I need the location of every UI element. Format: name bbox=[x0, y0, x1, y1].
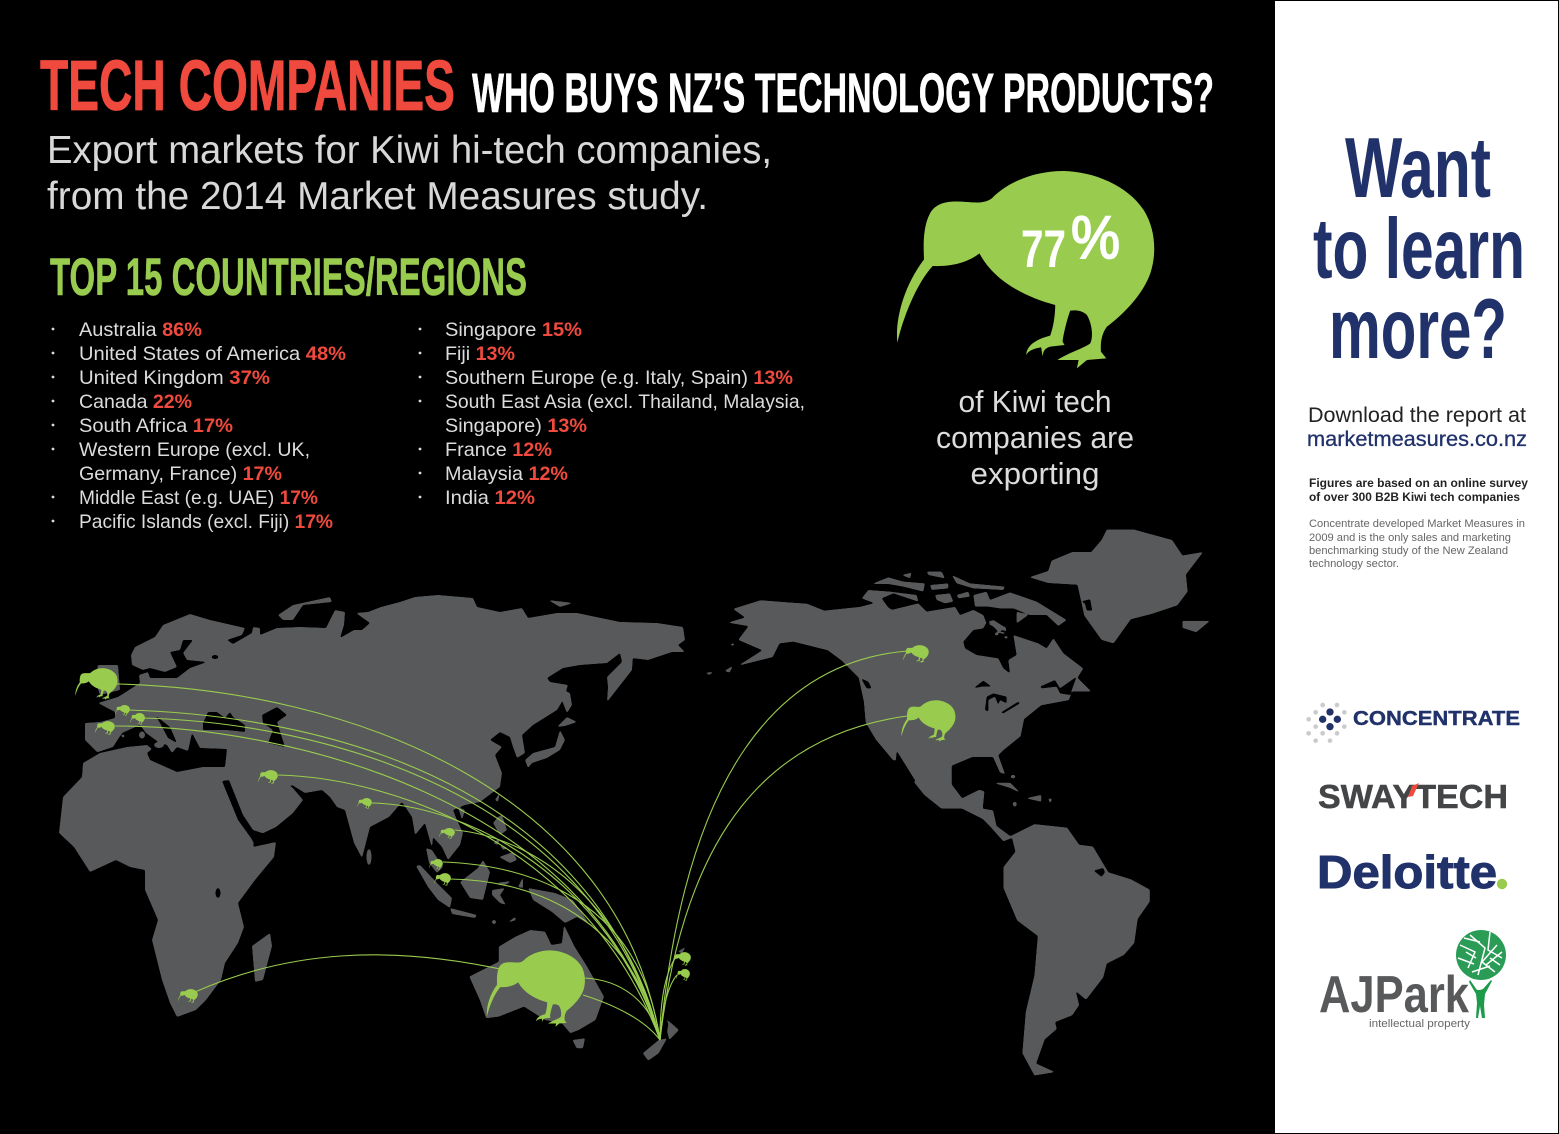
kiwi: Australia bbox=[487, 950, 585, 1027]
kiwi: India bbox=[357, 798, 372, 809]
panel: sidebar bbox=[1275, 1, 1558, 1133]
stat caption: companies are bbox=[936, 420, 1134, 455]
route lines to New Zealand bbox=[115, 651, 907, 1040]
kiwi: Italy bbox=[130, 713, 145, 725]
kiwi: Germany bbox=[115, 705, 130, 716]
map: land masses bbox=[0, 500, 1275, 1134]
map: Europe, Asia and Africa bbox=[59, 595, 685, 1017]
logo: AJ Park: intellectual property bbox=[1369, 1018, 1471, 1030]
heading: top 15 countries: TOP 15 COUNTRIES/REGIONS bbox=[50, 248, 527, 307]
kiwi markers by market bbox=[75, 645, 955, 1027]
subtitle: from the 2014 Market Measures study. bbox=[47, 175, 708, 218]
map: inland seas bbox=[95, 655, 287, 898]
list: countries column 2: South East Asia (excl. Thailand, Malaysia, bbox=[445, 391, 805, 413]
icon: tree figure bbox=[1456, 930, 1506, 1018]
text: about study: benchmarking study of the New Zealand bbox=[1309, 545, 1508, 557]
text: about study: Concentrate developed Market Measures in bbox=[1309, 518, 1525, 530]
list: countries column 1: United Kingdom 37% bbox=[79, 367, 270, 389]
logo: Concentrate bbox=[1306, 703, 1520, 743]
list: countries column 2: France 12% bbox=[445, 439, 552, 461]
kiwi: United Kingdom bbox=[75, 668, 118, 700]
logo: AJ Park bbox=[1319, 930, 1506, 1030]
logo: Concentrate: CONCENTRATE bbox=[1353, 707, 1520, 730]
stat: 77%: % bbox=[1071, 204, 1120, 271]
text: about study bbox=[1309, 518, 1525, 570]
list: countries column 2 bbox=[419, 319, 805, 509]
list: countries column 1: Canada 22% bbox=[79, 391, 192, 413]
text: download link bbox=[1307, 404, 1527, 451]
list: countries column 2: Singapore 15% bbox=[445, 319, 582, 341]
list: countries column 1: Germany, France) 17% bbox=[79, 463, 282, 485]
kiwi: Canada bbox=[903, 645, 929, 663]
list: countries column 2: India 12% bbox=[445, 487, 535, 509]
list: countries column 2: Fiji 13% bbox=[445, 343, 515, 365]
kiwi: Middle East bbox=[258, 770, 278, 784]
heading: want to learn more: Want bbox=[1345, 121, 1491, 216]
list: countries column 1: Pacific Islands (excl. Fiji) 17% bbox=[79, 511, 333, 533]
kiwi: Pacific Islands bbox=[676, 969, 690, 981]
text: survey basis: Figures are based on an online survey bbox=[1309, 476, 1528, 490]
icon: large kiwi bbox=[897, 171, 1154, 368]
text: download link: marketmeasures.co.nz bbox=[1307, 428, 1527, 451]
map: Americas and Greenland bbox=[705, 530, 1210, 1076]
text: survey basis: of over 300 B2B Kiwi tech companies bbox=[1309, 490, 1520, 504]
list: countries column 1 bbox=[52, 319, 346, 533]
subtitle bbox=[47, 129, 772, 218]
map: Australia and New Zealand bbox=[469, 925, 686, 1061]
list: countries column 1: Middle East (e.g. UAE) 17% bbox=[79, 487, 318, 509]
logo: Deloitte: Deloitte bbox=[1317, 846, 1497, 898]
stat: 77% bbox=[1021, 204, 1120, 279]
logo: Swaytech: SWAYTECH bbox=[1318, 778, 1508, 815]
list: countries column 1: United States of America 48% bbox=[79, 343, 346, 365]
logo: AJ Park: AJPark bbox=[1319, 966, 1469, 1024]
stat caption: exporting bbox=[970, 456, 1100, 491]
title: tech companies: TECH COMPANIES bbox=[40, 46, 455, 126]
stat: 77%: 77 bbox=[1021, 220, 1066, 279]
stat caption: of Kiwi tech bbox=[958, 384, 1112, 419]
callout: 77 percent kiwi bbox=[897, 171, 1154, 491]
map: United Kingdom bbox=[95, 665, 120, 695]
list: countries column 1: Australia 86% bbox=[79, 319, 202, 341]
list: countries column 2: Singapore) 13% bbox=[445, 415, 587, 437]
icon: dot cluster bbox=[1306, 703, 1347, 743]
stat caption bbox=[936, 384, 1134, 491]
list: countries column 1: South Africa 17% bbox=[79, 415, 233, 437]
kiwi: Singapore bbox=[434, 873, 451, 886]
text: survey basis bbox=[1309, 476, 1528, 504]
kiwi: Fiji bbox=[673, 952, 691, 966]
list: countries column 2: Malaysia 12% bbox=[445, 463, 568, 485]
kiwi: South Africa bbox=[178, 989, 198, 1003]
kiwi: Malaysia bbox=[429, 859, 443, 870]
map: Eurasian islands bbox=[122, 597, 590, 982]
kiwi: Spain bbox=[95, 721, 115, 735]
kiwi: United States bbox=[901, 700, 955, 742]
kiwi: Thailand bbox=[439, 828, 455, 839]
heading: want to learn more bbox=[1313, 121, 1525, 377]
text: download link: Download the report at bbox=[1308, 404, 1526, 427]
subtitle: Export markets for Kiwi hi-tech companies, bbox=[47, 129, 772, 172]
world map bbox=[0, 500, 1275, 1134]
list: countries column 1: Western Europe (excl. UK, bbox=[79, 439, 310, 461]
list: countries column 2: Southern Europe (e.g. Italy, Spain) 13% bbox=[445, 367, 793, 389]
text: about study: 2009 and is the only sales and marketing bbox=[1309, 532, 1511, 544]
text: about study: technology sector. bbox=[1309, 558, 1399, 570]
map: Hudson Bay, lakes and Arctic islands bbox=[861, 572, 1077, 713]
